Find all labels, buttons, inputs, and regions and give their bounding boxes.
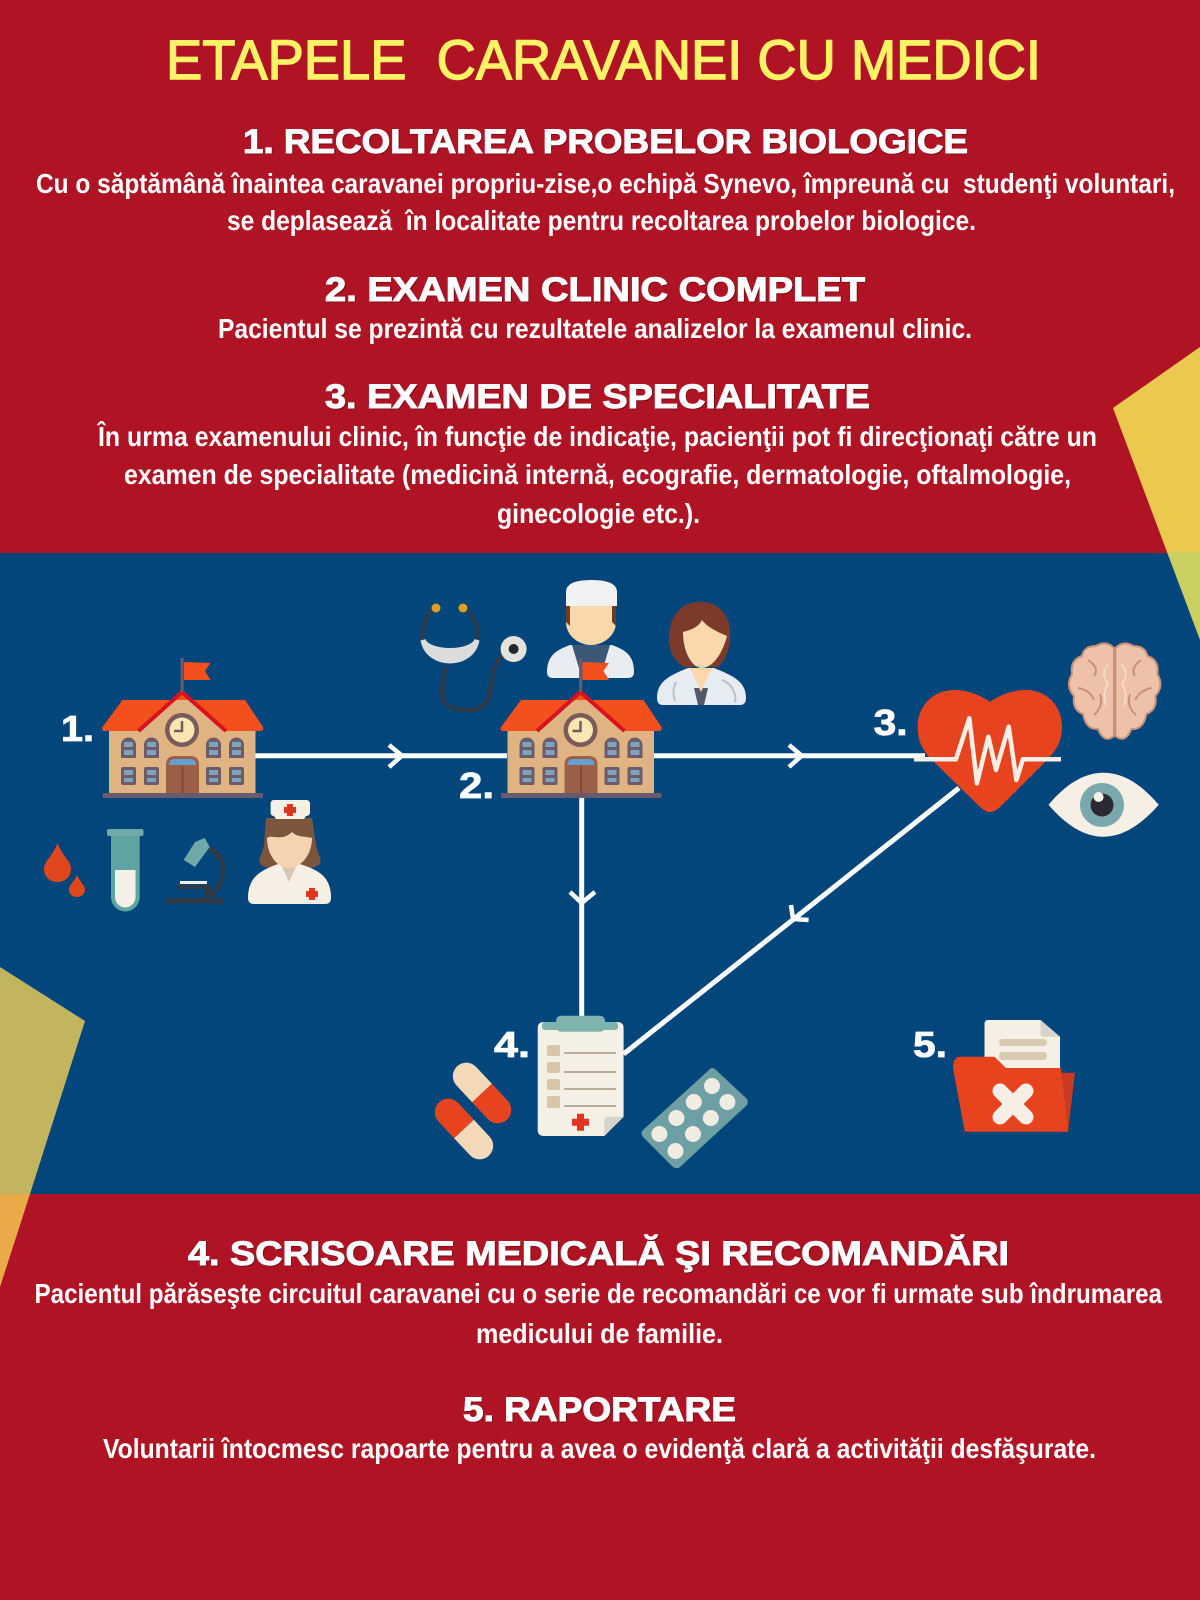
text: step 1 description: se deplasează în localitate pentru recoltarea probelor biologice.	[227, 205, 976, 236]
icon: nurse	[248, 800, 331, 904]
text: step 4 description	[34, 1278, 1162, 1349]
text: step 4 description: medicului de familie.	[476, 1318, 723, 1349]
heading: step 5: 5. RAPORTARE	[463, 1391, 736, 1429]
text: step 3 description: În urma examenului clinic, în funcţie de indicaţie, pacienţii pot fi direcţionaţi către un	[96, 421, 1097, 452]
arrow: heart to clipboard	[624, 788, 959, 1054]
text: step 1 description	[36, 168, 1175, 236]
panel: steps 4 and 5 text	[34, 1235, 1162, 1464]
heading: step 1: 1. RECOLTAREA PROBELOR BIOLOGICE	[243, 123, 968, 161]
decorative shape: right yellow polygon	[1113, 347, 1200, 640]
text: step 2 description: Pacientul se prezintă cu rezultatele analizelor la examenul clinic.	[218, 313, 972, 344]
label: 5.: 5.	[913, 1024, 947, 1065]
decorative shape: left yellow polygon	[0, 967, 85, 1287]
text: step 3 description: ginecologie etc.).	[497, 498, 700, 529]
icon: blister pack	[642, 1068, 748, 1168]
panel: steps 1 to 3 text	[36, 123, 1175, 529]
icon: school 2	[501, 658, 662, 798]
icon: blood drops	[44, 843, 85, 897]
icon: folder with report	[953, 1020, 1075, 1132]
text: step 3 description	[96, 421, 1097, 529]
icon: microscope	[166, 838, 224, 904]
icon: school 1	[102, 658, 263, 798]
arrow: school 2 to clipboard	[570, 798, 595, 1018]
text: step 5 description: Voluntarii întocmesc rapoarte pentru a avea o evidenţă clară a activităţii desfăşurate.	[103, 1433, 1096, 1464]
icon: eye	[1048, 773, 1159, 837]
arrow: school 1 to school 2	[255, 745, 507, 767]
icon: clipboard	[538, 1016, 624, 1136]
title: ETAPELE CARAVANEI CU MEDICI	[166, 28, 1041, 91]
icon: brain	[1069, 643, 1160, 739]
icon: heart with pulse	[914, 690, 1062, 812]
heading: step 3: 3. EXAMEN DE SPECIALITATE	[325, 378, 870, 416]
text: step 3 description: examen de specialitate (medicină internă, ecografie, dermatologie, oftalmologie,	[124, 459, 1071, 490]
label: 1.: 1.	[61, 708, 94, 749]
icon: stethoscope	[423, 604, 527, 710]
label: 2.: 2.	[459, 765, 494, 806]
icon: male doctor	[547, 580, 634, 678]
heading: step 2: 2. EXAMEN CLINIC COMPLET	[325, 271, 865, 309]
icon: woman doctor	[657, 602, 746, 705]
label: 3.: 3.	[874, 702, 908, 743]
icon: test tube	[107, 829, 144, 911]
label: 4.: 4.	[494, 1024, 530, 1065]
panel: blue diagram band	[0, 553, 1200, 1194]
heading: step 4: 4. SCRISOARE MEDICALĂ ŞI RECOMANDĂRI	[188, 1235, 1009, 1273]
icon: capsules	[429, 1057, 517, 1165]
arrow: school 2 to heart	[654, 745, 925, 767]
